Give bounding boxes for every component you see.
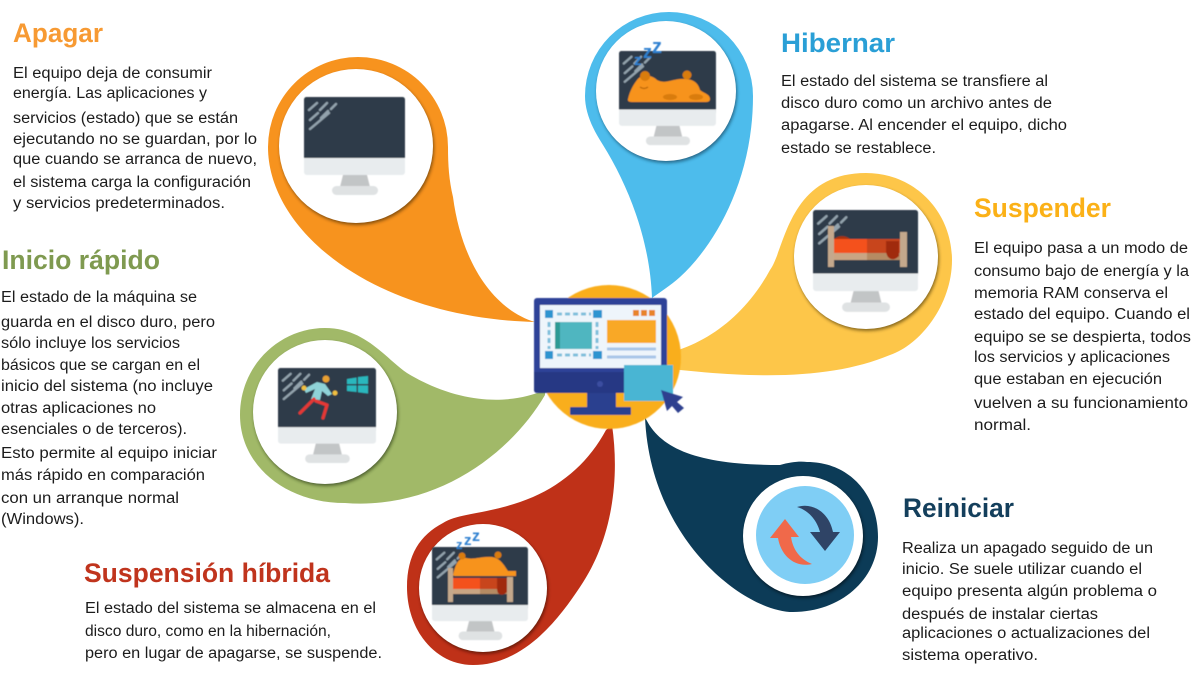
body: inicio rápido: (Windows). xyxy=(1,511,84,528)
text: suspensión híbrida xyxy=(84,558,382,662)
blue drop shape xyxy=(585,12,753,298)
body: suspensión híbrida: El estado del sistema se almacena en el xyxy=(85,600,376,617)
body: suspender: los servicios y aplicaciones xyxy=(974,349,1170,366)
body: apagar: y servicios predeterminados. xyxy=(13,195,225,212)
red drop shape xyxy=(407,425,615,665)
body: apagar: servicios (estado) que se están xyxy=(13,110,238,127)
body: reiniciar: aplicaciones o actualizaciones del xyxy=(902,625,1150,642)
body: hibernar: El estado del sistema se transfiere al xyxy=(781,73,1048,90)
circle shadow xyxy=(795,187,939,331)
panel: apagar drop xyxy=(268,57,535,322)
white circle xyxy=(794,185,938,329)
text: suspender xyxy=(974,193,1191,434)
body: hibernar: apagarse. Al encender el equipo, dicho xyxy=(781,117,1067,134)
icon: monitor with bear on bed: z xyxy=(456,537,463,552)
body: apagar: el sistema carga la configuración xyxy=(13,174,251,191)
text: inicio rápido xyxy=(1,245,217,528)
text: reiniciar xyxy=(902,493,1157,664)
orange drop shape xyxy=(268,57,535,322)
icon: monitor with sleeping bear: z xyxy=(652,36,662,58)
icon: monitor with bear on bed: z xyxy=(464,532,472,549)
heading: hibernar: Hibernar xyxy=(781,28,895,58)
panel: reiniciar drop xyxy=(645,417,878,612)
body: apagar: ejecutando no se guardan, por lo xyxy=(13,131,257,148)
body: inicio rápido: otras aplicaciones no xyxy=(1,400,156,417)
body: hibernar xyxy=(781,73,1067,157)
body: inicio rápido: básicos que se cargan en el xyxy=(1,357,200,374)
body: inicio rápido xyxy=(1,289,217,528)
body: suspender: que estaban en ejecución xyxy=(974,371,1162,388)
circle shadow xyxy=(744,478,864,598)
body: inicio rápido: sólo incluye los servicios xyxy=(1,335,180,352)
body: apagar: El equipo deja de consumir xyxy=(13,65,212,82)
body: suspender: vuelven a su funcionamiento xyxy=(974,395,1188,412)
icon: monitor with bear on bed xyxy=(432,528,528,640)
body: inicio rápido: Esto permite al equipo iniciar xyxy=(1,445,217,462)
body: reiniciar: sistema operativo. xyxy=(902,647,1038,664)
body: inicio rápido: guarda en el disco duro, pero xyxy=(1,314,215,331)
circle shadow xyxy=(420,526,548,654)
text: hibernar xyxy=(781,28,1067,157)
body: inicio rápido: con un arranque normal xyxy=(1,490,179,507)
heading: inicio rápido: Inicio rápido xyxy=(2,245,160,275)
green drop shape xyxy=(240,328,545,504)
heading: apagar: Apagar xyxy=(13,18,103,48)
white circle xyxy=(596,21,736,161)
circle shadow xyxy=(254,342,398,486)
body: suspender: El equipo pasa a un modo de xyxy=(974,240,1188,257)
body: reiniciar xyxy=(902,540,1157,664)
body: apagar: energía. Las aplicaciones y xyxy=(13,85,207,102)
body: suspender xyxy=(974,240,1191,434)
panel: suspensión híbrida drop xyxy=(407,425,615,665)
body: suspender: consumo bajo de energía y la xyxy=(974,263,1189,280)
body: suspender: memoria RAM conserva el xyxy=(974,285,1168,302)
icon: monitor with runner and windows logo xyxy=(278,368,376,463)
icon: restart arrows xyxy=(756,486,854,584)
icon: monitor with sleeping bear: z xyxy=(643,42,652,62)
body: apagar xyxy=(13,65,257,212)
heading: suspender: Suspender xyxy=(974,193,1111,223)
white circle xyxy=(419,524,547,652)
navy drop shape xyxy=(645,417,878,612)
circle shadow xyxy=(597,23,737,163)
body: apagar: que cuando se arranca de nuevo, xyxy=(13,151,257,168)
body: inicio rápido: más rápido en comparación xyxy=(1,467,205,484)
body: inicio rápido: inicio del sistema (no incluye xyxy=(1,378,213,395)
body: suspender: equipo se se despierta, todos xyxy=(974,329,1191,346)
body: reiniciar: inicio. Se suele utilizar cuando el xyxy=(902,561,1142,578)
heading: reiniciar: Reiniciar xyxy=(903,493,1014,523)
icon: monitor with bear on bed: z xyxy=(472,528,480,545)
body: suspensión híbrida xyxy=(85,600,382,662)
yellow drop shape xyxy=(640,173,952,375)
white circle xyxy=(743,476,863,596)
circle shadow xyxy=(280,71,434,225)
icon: monitor off xyxy=(304,97,405,195)
heading: suspensión híbrida: Suspensión híbrida xyxy=(84,558,331,588)
body: suspender: normal. xyxy=(974,417,1031,434)
panel: suspender drop xyxy=(640,173,952,375)
icon: monitor with bed xyxy=(813,210,918,312)
panel: inicio rápido drop xyxy=(240,328,545,504)
panel: hibernar drop xyxy=(585,12,753,298)
body: hibernar: estado se restablece. xyxy=(781,140,936,157)
body: reiniciar: Realiza un apagado seguido de un xyxy=(902,540,1153,557)
body: inicio rápido: esenciales o de terceros). xyxy=(1,421,187,438)
white circle xyxy=(253,340,397,484)
body: suspensión híbrida: pero en lugar de apagarse, se suspende. xyxy=(85,645,382,662)
body: suspensión híbrida: disco duro, como en la hibernación, xyxy=(85,623,331,640)
icon: monitor with sleeping bear: z xyxy=(634,52,642,69)
body: inicio rápido: El estado de la máquina se xyxy=(1,289,197,306)
body: reiniciar: después de instalar ciertas xyxy=(902,606,1098,623)
icon: monitor with sleeping bear xyxy=(619,36,716,145)
text: apagar xyxy=(13,18,257,212)
body: suspender: estado del equipo. Cuando el xyxy=(974,306,1190,323)
white circle xyxy=(279,69,433,223)
center computer xyxy=(534,285,684,429)
body: hibernar: disco duro como un archivo antes de xyxy=(781,95,1052,112)
body: reiniciar: equipo presenta algún problema o xyxy=(902,583,1157,600)
